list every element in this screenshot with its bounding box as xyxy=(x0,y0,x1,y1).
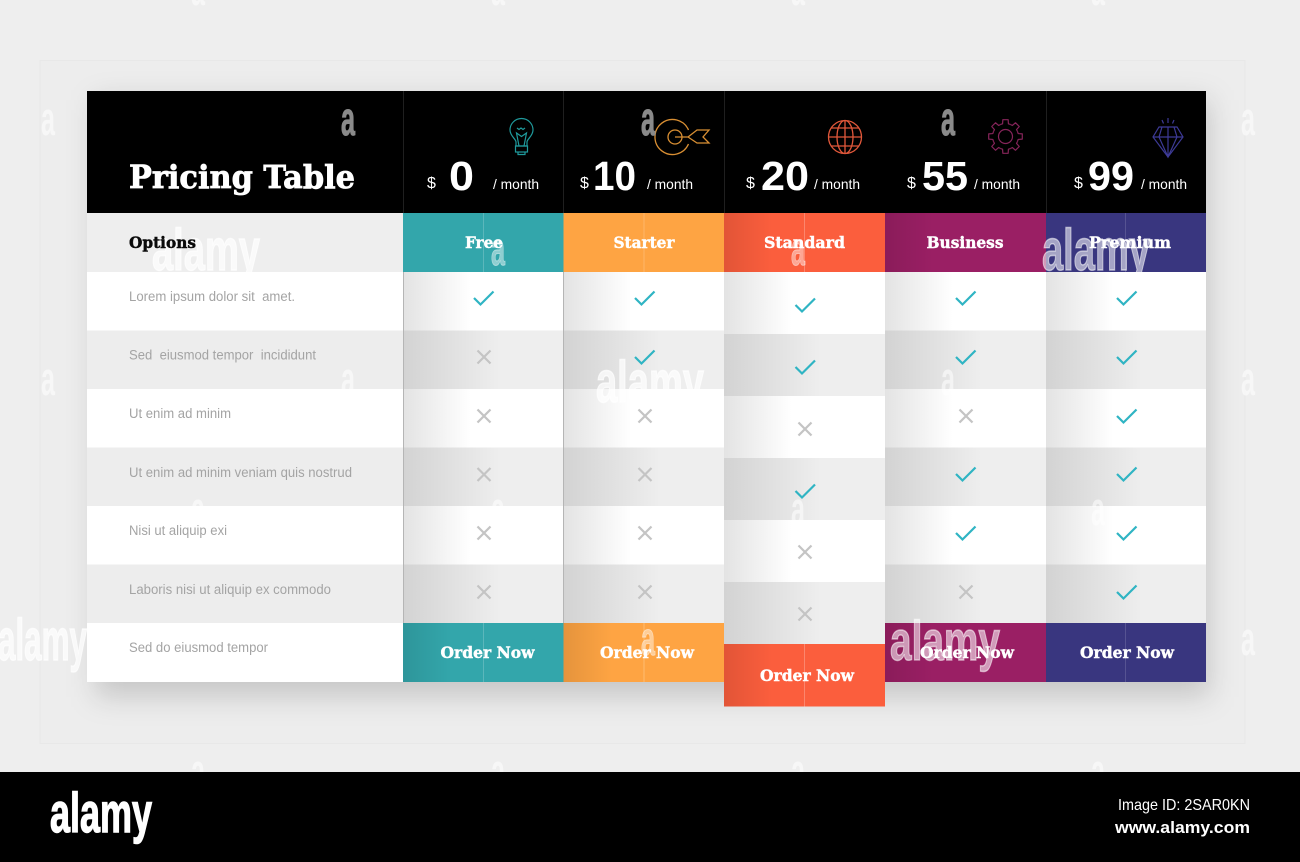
watermark: alamy on options: alamy xyxy=(152,218,260,283)
watermark: alamy left edge: alamy xyxy=(0,608,87,673)
left column last row cover xyxy=(87,623,403,682)
option labels: Sed do eiusmod tempor xyxy=(129,640,268,655)
price: business: / month xyxy=(974,176,1020,192)
watermarks: small letters: a xyxy=(641,92,655,145)
header band xyxy=(87,91,1206,213)
starter marks xyxy=(635,292,654,598)
business order button: alamy xyxy=(890,609,1000,672)
option labels: Ut enim ad minim xyxy=(129,406,231,421)
price: business: 55 xyxy=(922,153,968,199)
option labels: Laboris nisi ut aliquip ex commodo xyxy=(129,582,331,597)
price: starter: 10 xyxy=(593,153,636,199)
panel: business plan xyxy=(885,213,1046,682)
price: standard: / month xyxy=(814,176,860,192)
price: business xyxy=(907,153,1020,199)
watermarks: small letters: a xyxy=(791,222,805,275)
standard name bar: Standard xyxy=(764,233,845,252)
panel: starter plan xyxy=(564,213,724,682)
option labels: Nisi ut aliquip exi xyxy=(129,523,227,538)
free order button xyxy=(403,623,564,682)
premium plan name: Premium xyxy=(1089,233,1171,252)
option labels: Ut enim ad minim veniam quis nostrud xyxy=(129,465,352,480)
price: premium: $ xyxy=(1074,175,1083,192)
watermarks: small letters: a xyxy=(491,222,505,275)
premium order button xyxy=(1046,623,1206,682)
price: free: 0 xyxy=(449,153,474,199)
option labels xyxy=(129,289,352,655)
option labels: Sed eiusmod tempor incididunt xyxy=(129,348,316,362)
starter name bar xyxy=(564,213,724,272)
watermarks: small letters: a xyxy=(1241,352,1255,405)
watermarks: small letters: a xyxy=(491,482,505,535)
watermarks: small letters: a xyxy=(341,352,355,405)
price: starter: / month xyxy=(647,176,693,192)
price: business: $ xyxy=(907,175,916,192)
image id: Image ID: 2SAR0KN xyxy=(1118,797,1250,814)
starter order button xyxy=(564,623,724,682)
options heading: Options xyxy=(129,233,196,252)
business name bar: Business xyxy=(926,233,1004,252)
watermarks: small letters: a xyxy=(1241,612,1255,665)
premium marks xyxy=(1117,292,1136,598)
panel: free plan xyxy=(403,213,564,682)
watermarks: small letters: a xyxy=(191,482,205,535)
title: Pricing Table xyxy=(129,158,355,196)
business marks xyxy=(956,292,976,598)
standard order button: Order Now xyxy=(760,666,855,685)
free marks xyxy=(474,292,494,598)
watermarks: small letters: a xyxy=(1091,744,1105,797)
business name bar xyxy=(885,213,1046,272)
watermarks: small letters: a xyxy=(791,482,805,535)
watermarks: small letters: a xyxy=(641,612,655,665)
starter order button: Order Now xyxy=(600,643,695,662)
price: premium: 99 xyxy=(1088,153,1134,199)
outer faint frame xyxy=(40,60,1245,744)
price: standard: 20 xyxy=(761,153,809,199)
panel: standard plan xyxy=(724,213,885,706)
icon: target with arrow xyxy=(655,120,709,155)
watermarks: small letters: a xyxy=(1241,92,1255,145)
watermarks: small letters: a xyxy=(491,744,505,797)
watermarks: small letters: a xyxy=(41,92,55,145)
website: www.alamy.com xyxy=(1114,818,1250,837)
footer logo: alamy xyxy=(50,781,152,844)
standard order button xyxy=(724,644,885,706)
premium order button: Order Now xyxy=(1080,643,1175,662)
table drop shadow xyxy=(95,100,1210,697)
watermarks: small letters: a xyxy=(941,352,955,405)
footer bar xyxy=(0,772,1300,862)
free name bar xyxy=(403,213,564,272)
free name bar: Free xyxy=(465,233,503,252)
option labels: Lorem ipsum dolor sit amet. xyxy=(129,289,295,304)
watermarks: small letters: a xyxy=(41,352,55,405)
price: free: / month xyxy=(493,176,539,192)
watermark: alamy on premium header: alamy xyxy=(1042,218,1150,283)
price: premium xyxy=(1074,153,1187,199)
watermarks: small letters: a xyxy=(1091,482,1105,535)
icon: diamond xyxy=(1153,118,1183,157)
business order button: Order Now xyxy=(920,643,1015,662)
price: free xyxy=(427,153,539,199)
price: starter xyxy=(580,153,693,199)
starter name bar: Starter xyxy=(614,233,675,252)
last option label: Sed do eiusmod tempor xyxy=(129,640,268,655)
watermarks: small letters: a xyxy=(941,92,955,145)
premium name bar xyxy=(1046,213,1206,272)
price: free: $ xyxy=(427,175,436,192)
icon: light bulb xyxy=(510,118,533,154)
watermarks: small letters: a xyxy=(341,92,355,145)
price: premium: / month xyxy=(1141,176,1187,192)
watermarks: small letters: a xyxy=(791,744,805,797)
price: starter: $ xyxy=(580,175,589,192)
price: standard: $ xyxy=(746,175,755,192)
price: standard xyxy=(746,153,860,199)
icon: globe xyxy=(828,120,862,154)
free order button: Order Now xyxy=(440,643,536,662)
standard marks xyxy=(796,298,815,620)
panel: options column xyxy=(87,213,403,682)
panel: premium plan xyxy=(1046,213,1206,682)
watermark: alamy on starter: alamy xyxy=(596,350,704,415)
icon: gear xyxy=(989,120,1022,153)
standard name bar xyxy=(724,213,885,272)
watermarks: small letters: a xyxy=(191,744,205,797)
